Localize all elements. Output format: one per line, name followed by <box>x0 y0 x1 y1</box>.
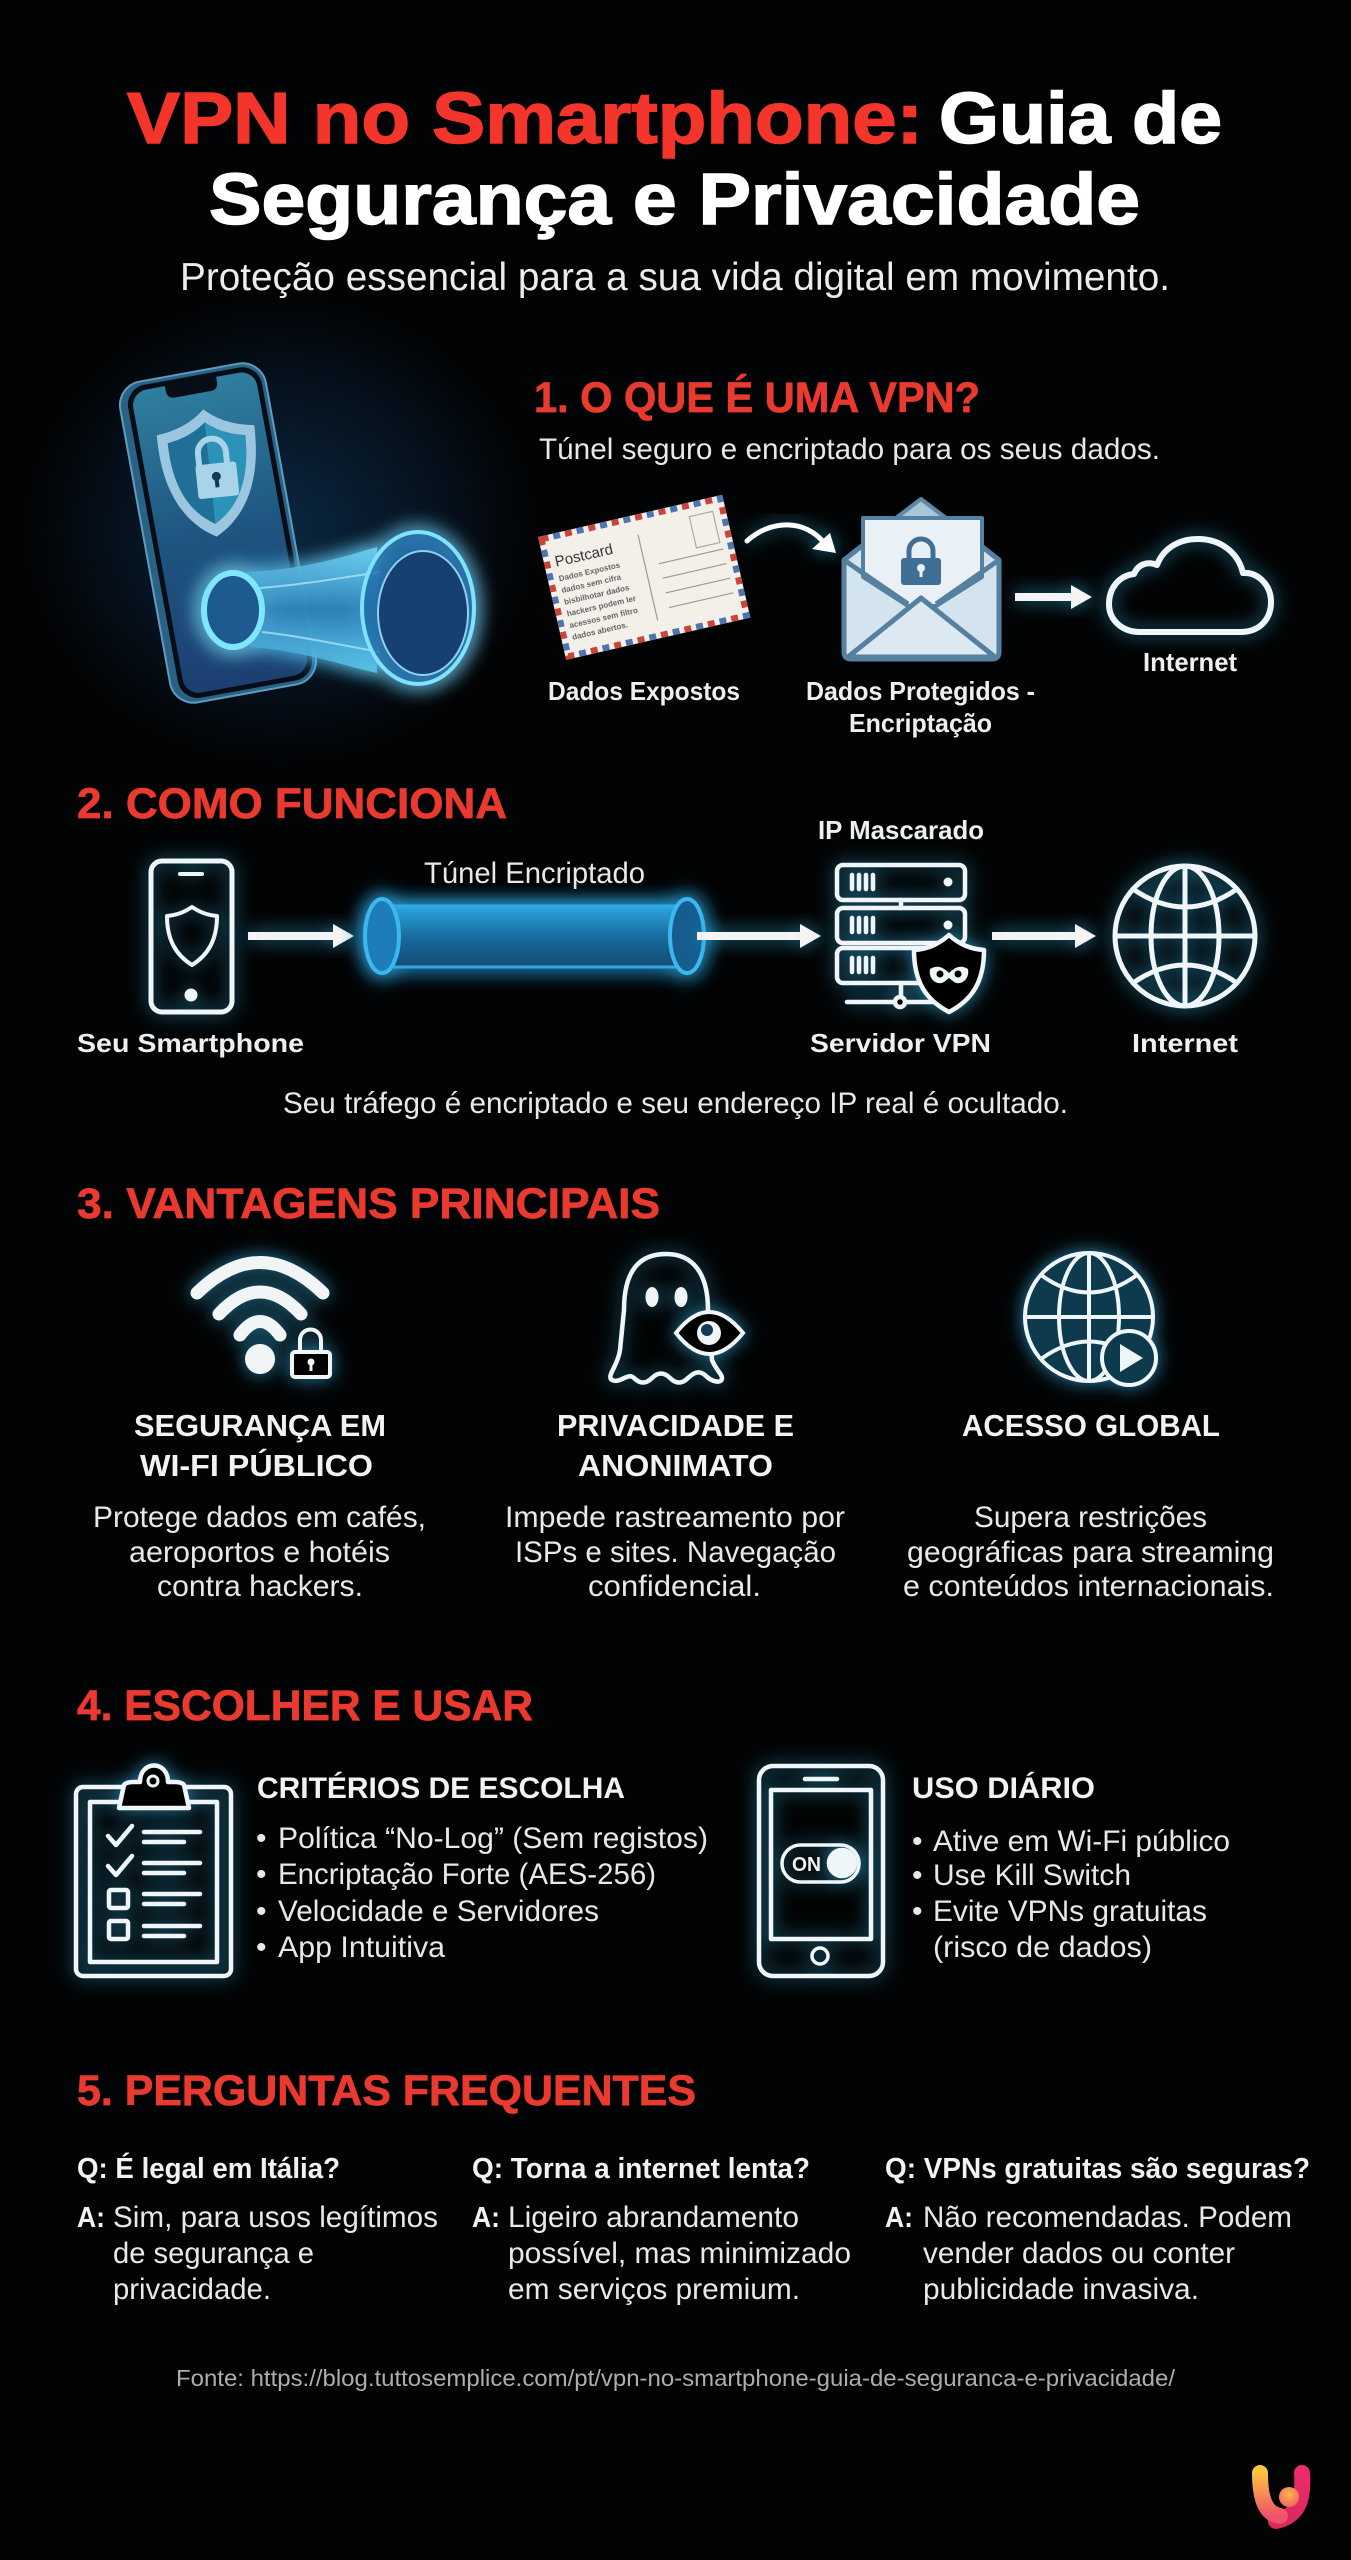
faq: speed <box>472 2153 851 2306</box>
faq: free VPNs <box>885 2153 1310 2306</box>
section 1: heading: 1. O QUE É UMA VPN? <box>534 374 980 422</box>
bullet list: Evite VPNs gratuitas <box>933 1895 1207 1928</box>
heading: USO DIÁRIO <box>912 1771 1095 1805</box>
body text: geográficas para streaming <box>907 1536 1274 1569</box>
icon: postcard: hackers podem ler <box>566 594 637 618</box>
icon: ghost with eye <box>610 1254 743 1382</box>
faq: speed: A: <box>472 2202 500 2234</box>
heading: ANONIMATO <box>578 1448 773 1483</box>
labels: section 2: Internet <box>1132 1028 1238 1058</box>
faq: legal: A: <box>77 2202 105 2234</box>
label: IP mascarado: IP Mascarado <box>818 815 984 845</box>
section 3: heading: 3. VANTAGENS PRINCIPAIS <box>77 1180 660 1228</box>
body text <box>93 1501 426 1603</box>
bullet list: • <box>912 1825 923 1858</box>
faq: legal <box>77 2151 438 2306</box>
title: VPN no Smartphone: <box>127 79 923 159</box>
section 2: heading: 2. COMO FUNCIONA <box>77 780 507 828</box>
heading: ACESSO GLOBAL <box>962 1408 1220 1443</box>
panel: privacidade e anonimato <box>505 1254 845 1603</box>
panel: uso diário <box>912 1771 1230 1964</box>
faq: speed: Q: Torna a internet lenta? <box>472 2153 810 2185</box>
icon: postcard <box>538 495 750 660</box>
faq: legal: Q: É legal em Itália? <box>77 2151 340 2185</box>
title <box>127 79 1222 240</box>
bullet list <box>912 1825 1230 1964</box>
labels: section 1: Encriptação <box>849 708 992 738</box>
icon: cloud <box>1109 539 1271 632</box>
bullet list: • <box>912 1895 923 1928</box>
arrow: server to internet <box>992 924 1096 948</box>
icon: postcard: acessos sem filtro <box>569 606 639 630</box>
icon: phone with ON toggle <box>759 1766 883 1976</box>
body text: Protege dados em cafés, <box>93 1501 426 1534</box>
icon: envelope with padlock <box>844 499 999 659</box>
body text: e conteúdos internacionais. <box>903 1570 1274 1603</box>
title: Segurança e Privacidade <box>209 160 1140 240</box>
faq: speed: em serviços premium. <box>508 2273 800 2306</box>
subtitle: Proteção essencial para a sua vida digital em movimento. <box>180 256 1170 299</box>
illustration: phone with shield and tunnel <box>116 359 474 707</box>
labels: section 1: Internet <box>1143 647 1237 677</box>
panel: acesso global <box>903 1253 1274 1603</box>
section 5: heading: 5. PERGUNTAS FREQUENTES <box>77 2067 696 2115</box>
bullet list: • <box>256 1858 267 1891</box>
faq: free VPNs: Q: VPNs gratuitas são seguras? <box>885 2153 1310 2185</box>
icon: globe <box>1115 866 1255 1006</box>
icon: postcard: bisbilhotar dados <box>563 583 631 607</box>
bullet list: App Intuitiva <box>278 1931 445 1964</box>
faq: speed: possível, mas minimizado <box>508 2237 851 2270</box>
bullet list: Política “No-Log” (Sem registos) <box>278 1822 708 1855</box>
bullet list: • <box>256 1895 267 1928</box>
arrow: curved <box>747 525 836 553</box>
body text: confidencial. <box>588 1570 761 1603</box>
heading <box>134 1408 386 1483</box>
labels: section 2: Seu Smartphone <box>77 1028 304 1058</box>
bullet list: • <box>912 1859 923 1892</box>
icon: clipboard checklist <box>76 1766 231 1976</box>
bullet list: Use Kill Switch <box>933 1859 1131 1892</box>
heading: CRITÉRIOS DE ESCOLHA <box>257 1771 625 1805</box>
source line: Fonte: https://blog.tuttosemplice.com/pt/vpn-no-smartphone-guia-de-seguranca-e-privacidade/ <box>176 2365 1176 2391</box>
icon: encrypted tunnel <box>365 899 704 973</box>
body text: Supera restrições <box>974 1501 1207 1534</box>
label: túnel encriptado: Túnel Encriptado <box>424 857 645 890</box>
icon: postcard: dados abertos. <box>571 620 629 642</box>
body text: Impede rastreamento por <box>505 1501 845 1534</box>
faq: free VPNs: A: <box>885 2202 913 2234</box>
faq: free VPNs: vender dados ou conter <box>923 2237 1235 2270</box>
icon: VPN server with mask shield <box>837 865 984 1012</box>
labels: section 1: Dados Expostos <box>548 676 740 706</box>
icon: postcard: dados sem cifra <box>561 572 622 595</box>
arrow: phone to tunnel <box>248 924 354 948</box>
faq: legal: Sim, para usos legítimos <box>113 2201 438 2234</box>
icon: smartphone with shield <box>151 861 232 1012</box>
shield with padlock <box>155 404 265 542</box>
bullet list: (risco de dados) <box>933 1931 1152 1964</box>
section 1: description: Túnel seguro e encriptado para os seus dados. <box>539 433 1160 466</box>
body text: contra hackers. <box>157 1570 363 1603</box>
labels: section 2: Servidor VPN <box>810 1028 991 1058</box>
arrow: envelope to cloud <box>1015 585 1092 609</box>
section 4: heading: 4. ESCOLHER E USAR <box>77 1682 533 1730</box>
icon: wifi with lock <box>197 1262 330 1377</box>
title: Guia de <box>939 79 1222 159</box>
faq: speed: Ligeiro abrandamento <box>508 2201 799 2234</box>
panel: critérios de escolha <box>256 1771 708 1964</box>
bullet list: Velocidade e Servidores <box>278 1895 599 1928</box>
logo <box>1260 2473 1302 2521</box>
arrow: tunnel to server <box>697 924 821 948</box>
faq: legal: de segurança e <box>113 2237 314 2270</box>
bullet list: • <box>256 1931 267 1964</box>
heading: WI-FI PÚBLICO <box>140 1447 373 1483</box>
panel: segurança em wi-fi público <box>93 1262 426 1603</box>
faq: free VPNs: publicidade invasiva. <box>923 2273 1199 2306</box>
glowing tunnel <box>204 532 474 684</box>
phone body <box>116 359 320 707</box>
labels: section 2 <box>77 1028 1238 1058</box>
labels: section 1: Dados Protegidos - <box>806 676 1035 706</box>
bullet list: Ative em Wi-Fi público <box>933 1825 1230 1858</box>
body text: ISPs e sites. Navegação <box>515 1536 836 1569</box>
bullet list: • <box>256 1822 267 1855</box>
labels: section 1 <box>548 647 1237 738</box>
icon: phone with ON toggle: ON <box>792 1854 821 1876</box>
body text <box>505 1501 845 1603</box>
heading: SEGURANÇA EM <box>134 1408 386 1443</box>
icon: postcard: Postcard <box>553 541 615 571</box>
icon: globe with play button <box>1025 1253 1156 1385</box>
body text <box>903 1501 1274 1603</box>
section 2: caption: Seu tráfego é encriptado e seu endereço IP real é ocultado. <box>283 1087 1068 1120</box>
body text: aeroportos e hotéis <box>129 1536 390 1569</box>
icon: postcard: Dados Expostos <box>558 560 622 583</box>
heading <box>557 1408 794 1483</box>
bullet list <box>256 1822 708 1964</box>
heading: PRIVACIDADE E <box>557 1408 794 1443</box>
faq: free VPNs: Não recomendadas. Podem <box>923 2201 1292 2234</box>
bullet list: Encriptação Forte (AES-256) <box>278 1858 656 1891</box>
faq: legal: privacidade. <box>113 2273 271 2306</box>
